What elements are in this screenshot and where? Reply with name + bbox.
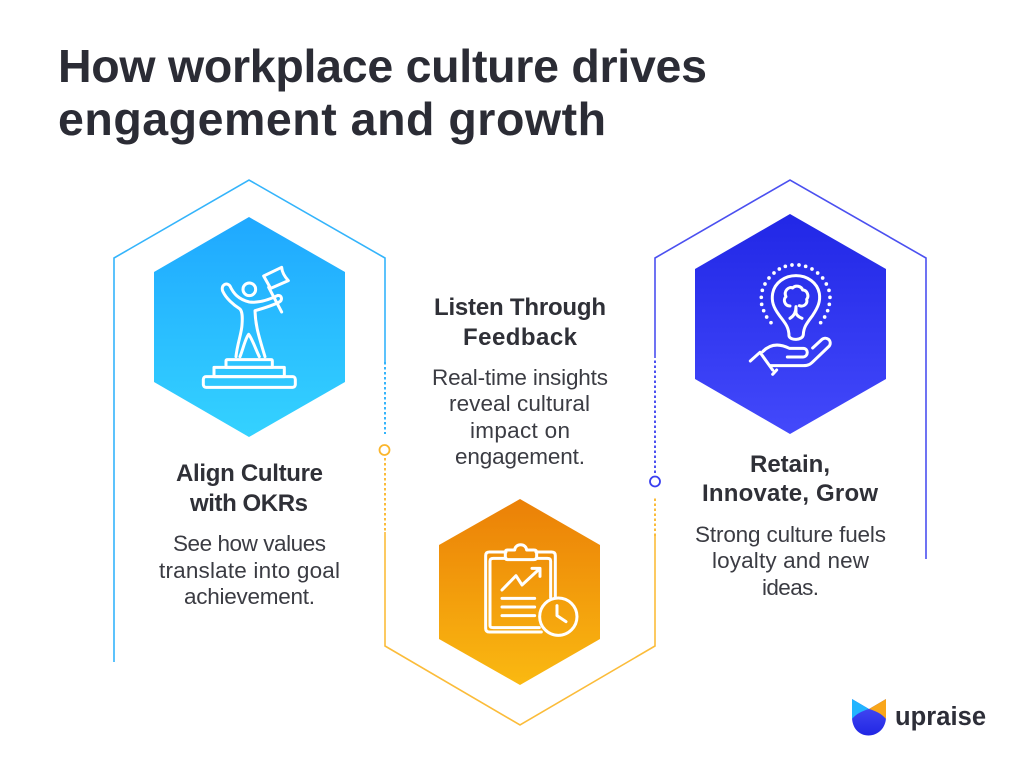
heading: [434, 294, 606, 351]
connector outline: purple: [655, 180, 926, 559]
body text: translate into goal: [159, 558, 340, 583]
body text: [159, 531, 340, 609]
heading: Retain,: [750, 451, 830, 478]
body text: Strong culture fuels: [695, 522, 886, 547]
connector node: orange: [380, 445, 390, 455]
body text: [432, 365, 608, 469]
body text: reveal cultural: [449, 391, 590, 416]
connector outline: blue: [114, 180, 385, 662]
wordmark: upraise: [895, 703, 986, 731]
title: How workplace culture drives: [58, 40, 707, 92]
heading: Align Culture: [176, 460, 323, 487]
title: engagement and growth: [58, 93, 606, 145]
logo: upraise: [852, 699, 986, 736]
heading: Innovate, Grow: [702, 480, 878, 507]
body text: loyalty and new: [712, 548, 870, 573]
body text: achievement.: [184, 584, 315, 609]
body text: ideas.: [762, 575, 819, 600]
heading: [176, 460, 323, 517]
connector outline: orange: [385, 458, 655, 725]
hexagon: purple: [695, 214, 886, 434]
body text: Real-time insights: [432, 365, 608, 390]
body text: [695, 522, 886, 600]
title: [58, 40, 707, 145]
body text: impact on: [470, 418, 570, 443]
heading: [702, 451, 878, 507]
body text: engagement.: [455, 444, 585, 469]
panel: listen through feedback: [432, 294, 608, 685]
panel: retain, innovate, grow: [695, 214, 886, 600]
heading: with OKRs: [189, 490, 308, 517]
icon: figure with flag on podium: [203, 267, 295, 387]
icon: lightbulb with tree over hand: [750, 265, 830, 374]
panel: align culture with OKRs: [154, 217, 345, 609]
hexagon: orange: [439, 499, 600, 685]
hexagon: blue: [154, 217, 345, 437]
icon: clipboard with chart and clock: [486, 545, 577, 635]
icon: upraise shield: [852, 699, 886, 736]
body text: See how values: [173, 531, 326, 556]
heading: Feedback: [463, 324, 578, 351]
connector node: purple: [650, 476, 660, 486]
heading: Listen Through: [434, 294, 606, 321]
